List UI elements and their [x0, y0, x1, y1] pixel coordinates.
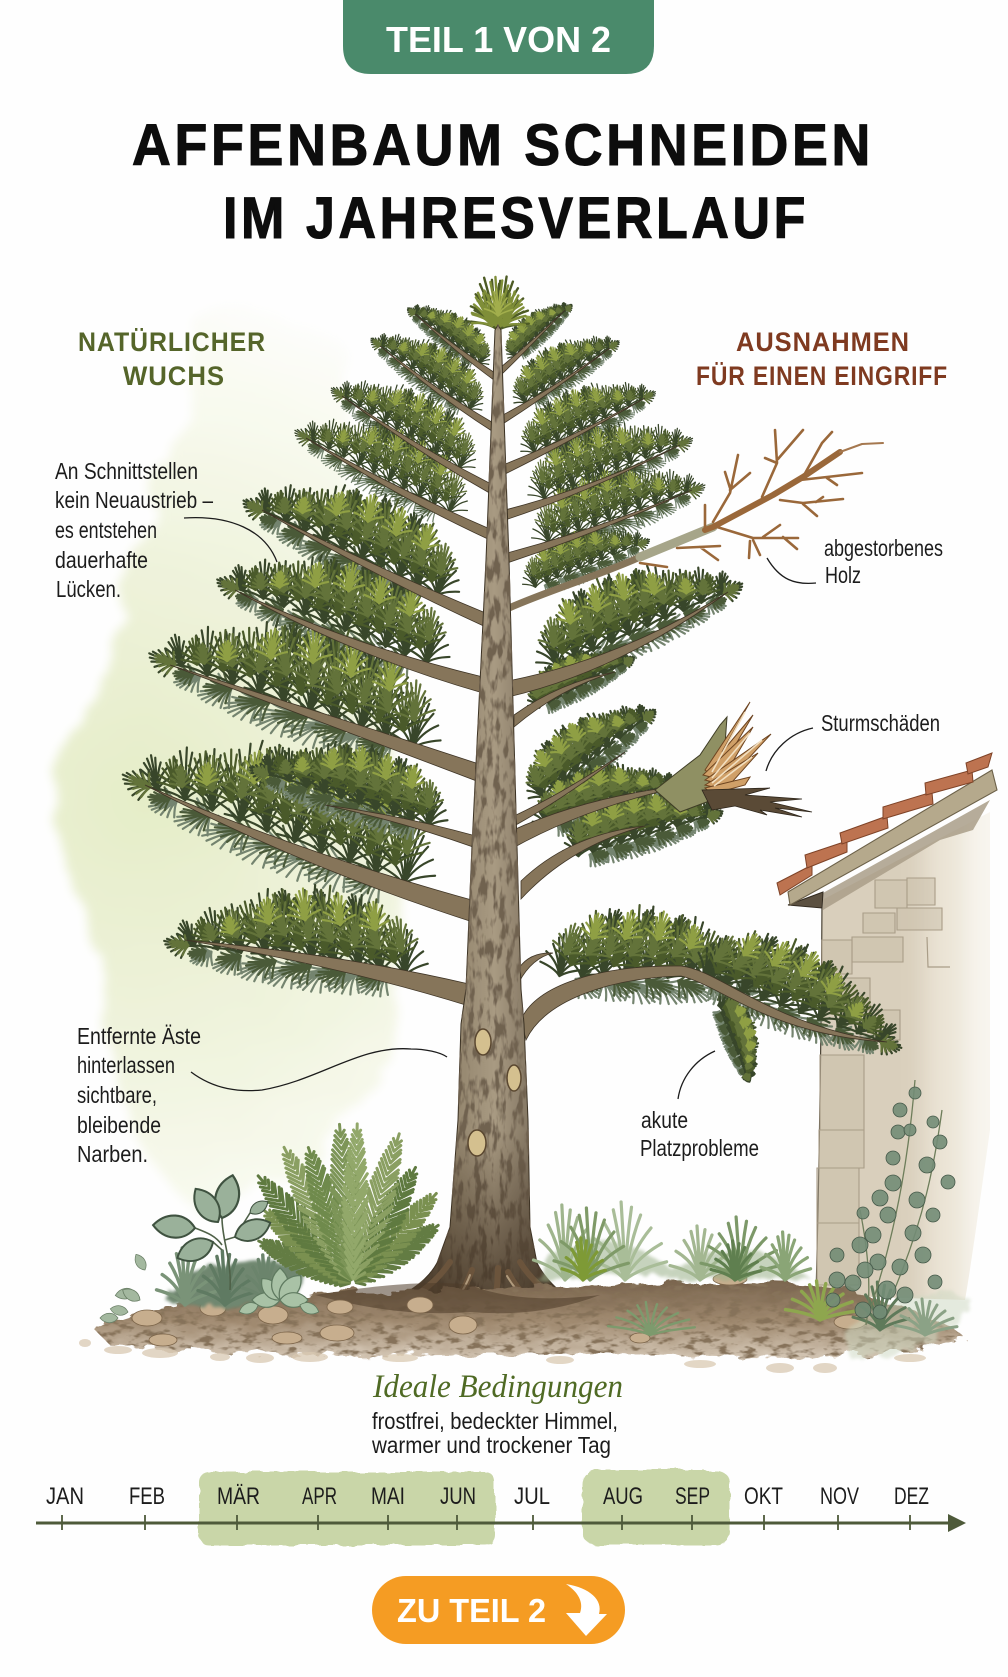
lower limb among foliage — [509, 557, 640, 608]
highlight: August to September — [582, 1470, 730, 1545]
callout: no regrowth: es entstehen — [55, 517, 157, 543]
title: AFFENBAUM SCHNEIDEN — [132, 113, 874, 178]
roof tiles — [777, 753, 992, 895]
trunk — [392, 325, 585, 1322]
callout: no regrowth: An Schnittstellen — [55, 458, 198, 484]
month labels: OKT — [744, 1483, 783, 1510]
month labels: JUL — [514, 1483, 550, 1510]
dark shading at trunk base — [392, 1130, 578, 1305]
callout: dead wood: Holz — [825, 562, 861, 588]
icon: curved down arrow — [566, 1584, 607, 1636]
callout: no regrowth: kein Neuaustrieb – — [55, 487, 213, 513]
callout: space problems — [640, 1051, 759, 1161]
roof fascia board — [788, 770, 997, 905]
leader line — [184, 518, 277, 562]
dead branch — [509, 430, 883, 608]
highlight: March to June — [199, 1472, 495, 1545]
button: to part 2: ZU TEIL 2 — [397, 1592, 546, 1629]
heading: natural growth: NATÜRLICHER — [78, 327, 266, 357]
badge: part 1 of 2: TEIL 1 VON 2 — [386, 19, 611, 60]
ideal conditions text: Ideale Bedingungen — [372, 1369, 623, 1405]
heading: natural growth — [78, 327, 266, 391]
scattered pale pebbles — [79, 1339, 926, 1373]
callout: scars — [77, 1023, 447, 1167]
callout: scars: sichtbare, — [77, 1082, 157, 1108]
lower left foliage — [103, 436, 487, 1021]
twigs — [640, 430, 862, 567]
callout: scars: Entfernte Äste — [77, 1023, 201, 1049]
leafy plant left — [152, 1173, 321, 1317]
callout: space problems: Platzprobleme — [640, 1135, 759, 1161]
pruning scars on trunk — [468, 1029, 521, 1156]
wooden splinters — [703, 702, 771, 794]
callout: storm damage — [766, 710, 940, 771]
axis arrowhead — [948, 1514, 966, 1532]
ivy leaves — [826, 1087, 955, 1319]
badge: part 1 of 2 — [343, 0, 654, 74]
bright low plant — [786, 1281, 857, 1320]
callout: scars: bleibende — [77, 1112, 161, 1138]
callout: storm damage: Sturmschäden — [821, 710, 940, 736]
dense ground cover left — [100, 1248, 306, 1323]
month labels: FEB — [129, 1483, 165, 1510]
stones — [132, 1273, 866, 1346]
heading: exceptions: AUSNAHMEN — [736, 327, 910, 357]
grass plants right of trunk — [534, 1202, 811, 1335]
ivy on the wall — [786, 1080, 972, 1358]
lower right foliage — [504, 522, 925, 1087]
callout: scars: Narben. — [77, 1141, 148, 1167]
foliage: conifer tiers — [103, 271, 925, 1087]
heading: exceptions: FÜR EINEN EINGRIFF — [696, 361, 948, 391]
wall mortar marks — [927, 937, 950, 967]
heading: natural growth: WUCHS — [123, 361, 225, 391]
ideal conditions text — [371, 1369, 623, 1458]
leader line — [766, 728, 813, 771]
callout: no regrowth: Lücken. — [56, 576, 121, 602]
month labels: JAN — [46, 1483, 84, 1510]
leader line — [767, 558, 816, 583]
callout: no regrowth — [55, 458, 277, 602]
small bushy tufts — [156, 1248, 289, 1305]
ideal conditions text: frostfrei, bedeckter Himmel, — [372, 1408, 618, 1434]
pale base of the dead limb — [640, 527, 713, 557]
title — [132, 113, 874, 251]
shadow under roof — [823, 800, 990, 910]
watercolor wash behind tree — [52, 308, 400, 1215]
callout: dead wood — [767, 535, 943, 588]
broken branch with splinters — [655, 702, 812, 817]
month labels: APR — [302, 1483, 337, 1510]
fern plant left of trunk — [247, 1123, 446, 1295]
splinter highlights — [712, 712, 762, 786]
top tuft — [460, 271, 537, 336]
main limb — [705, 452, 840, 530]
callout: dead wood: abgestorbenes — [824, 535, 943, 561]
timeline — [36, 1470, 966, 1545]
callout: space problems: akute — [641, 1107, 688, 1133]
month labels: JUN — [440, 1483, 476, 1510]
mossy stump — [655, 717, 727, 812]
month ticks — [62, 1515, 910, 1530]
ideal conditions text: warmer und trockener Tag — [371, 1432, 611, 1458]
month labels: MÄR — [217, 1483, 260, 1510]
heading: exceptions — [696, 327, 948, 391]
axis arrow — [36, 1522, 950, 1524]
wall left edge — [816, 900, 822, 1295]
small tuft in the soil — [608, 1302, 695, 1335]
dark soil by the roots — [315, 1283, 600, 1313]
leader line — [191, 1049, 447, 1091]
month labels: DEZ — [894, 1483, 929, 1510]
month labels: AUG — [603, 1483, 643, 1510]
roof underside — [788, 892, 823, 908]
pale leaves at far left — [100, 1252, 149, 1323]
dense low ivy tufts — [853, 1282, 957, 1335]
wall stones — [817, 878, 942, 1285]
month labels: MAI — [371, 1483, 405, 1510]
month labels — [46, 1483, 929, 1510]
torn dark wood tail — [702, 788, 812, 817]
upper left foliage — [280, 284, 505, 548]
title: IM JAHRESVERLAUF — [223, 186, 809, 251]
vine stems — [860, 1080, 942, 1325]
callout: scars: hinterlassen — [77, 1052, 175, 1078]
pale low rosette — [237, 1268, 321, 1317]
roots — [395, 1262, 585, 1322]
branches — [145, 310, 887, 1042]
month labels: NOV — [820, 1483, 859, 1510]
upper right foliage — [493, 286, 715, 612]
pale wash at the foot of the ivy — [845, 1292, 972, 1358]
house with stone wall and tiled roof — [777, 753, 1008, 1320]
callout: no regrowth: dauerhafte — [55, 547, 148, 573]
ground with stones — [79, 1273, 965, 1373]
leader line — [678, 1051, 715, 1099]
month labels: SEP — [675, 1483, 710, 1510]
button: to part 2 — [372, 1576, 625, 1644]
stone wall fading to the right — [818, 812, 990, 1300]
